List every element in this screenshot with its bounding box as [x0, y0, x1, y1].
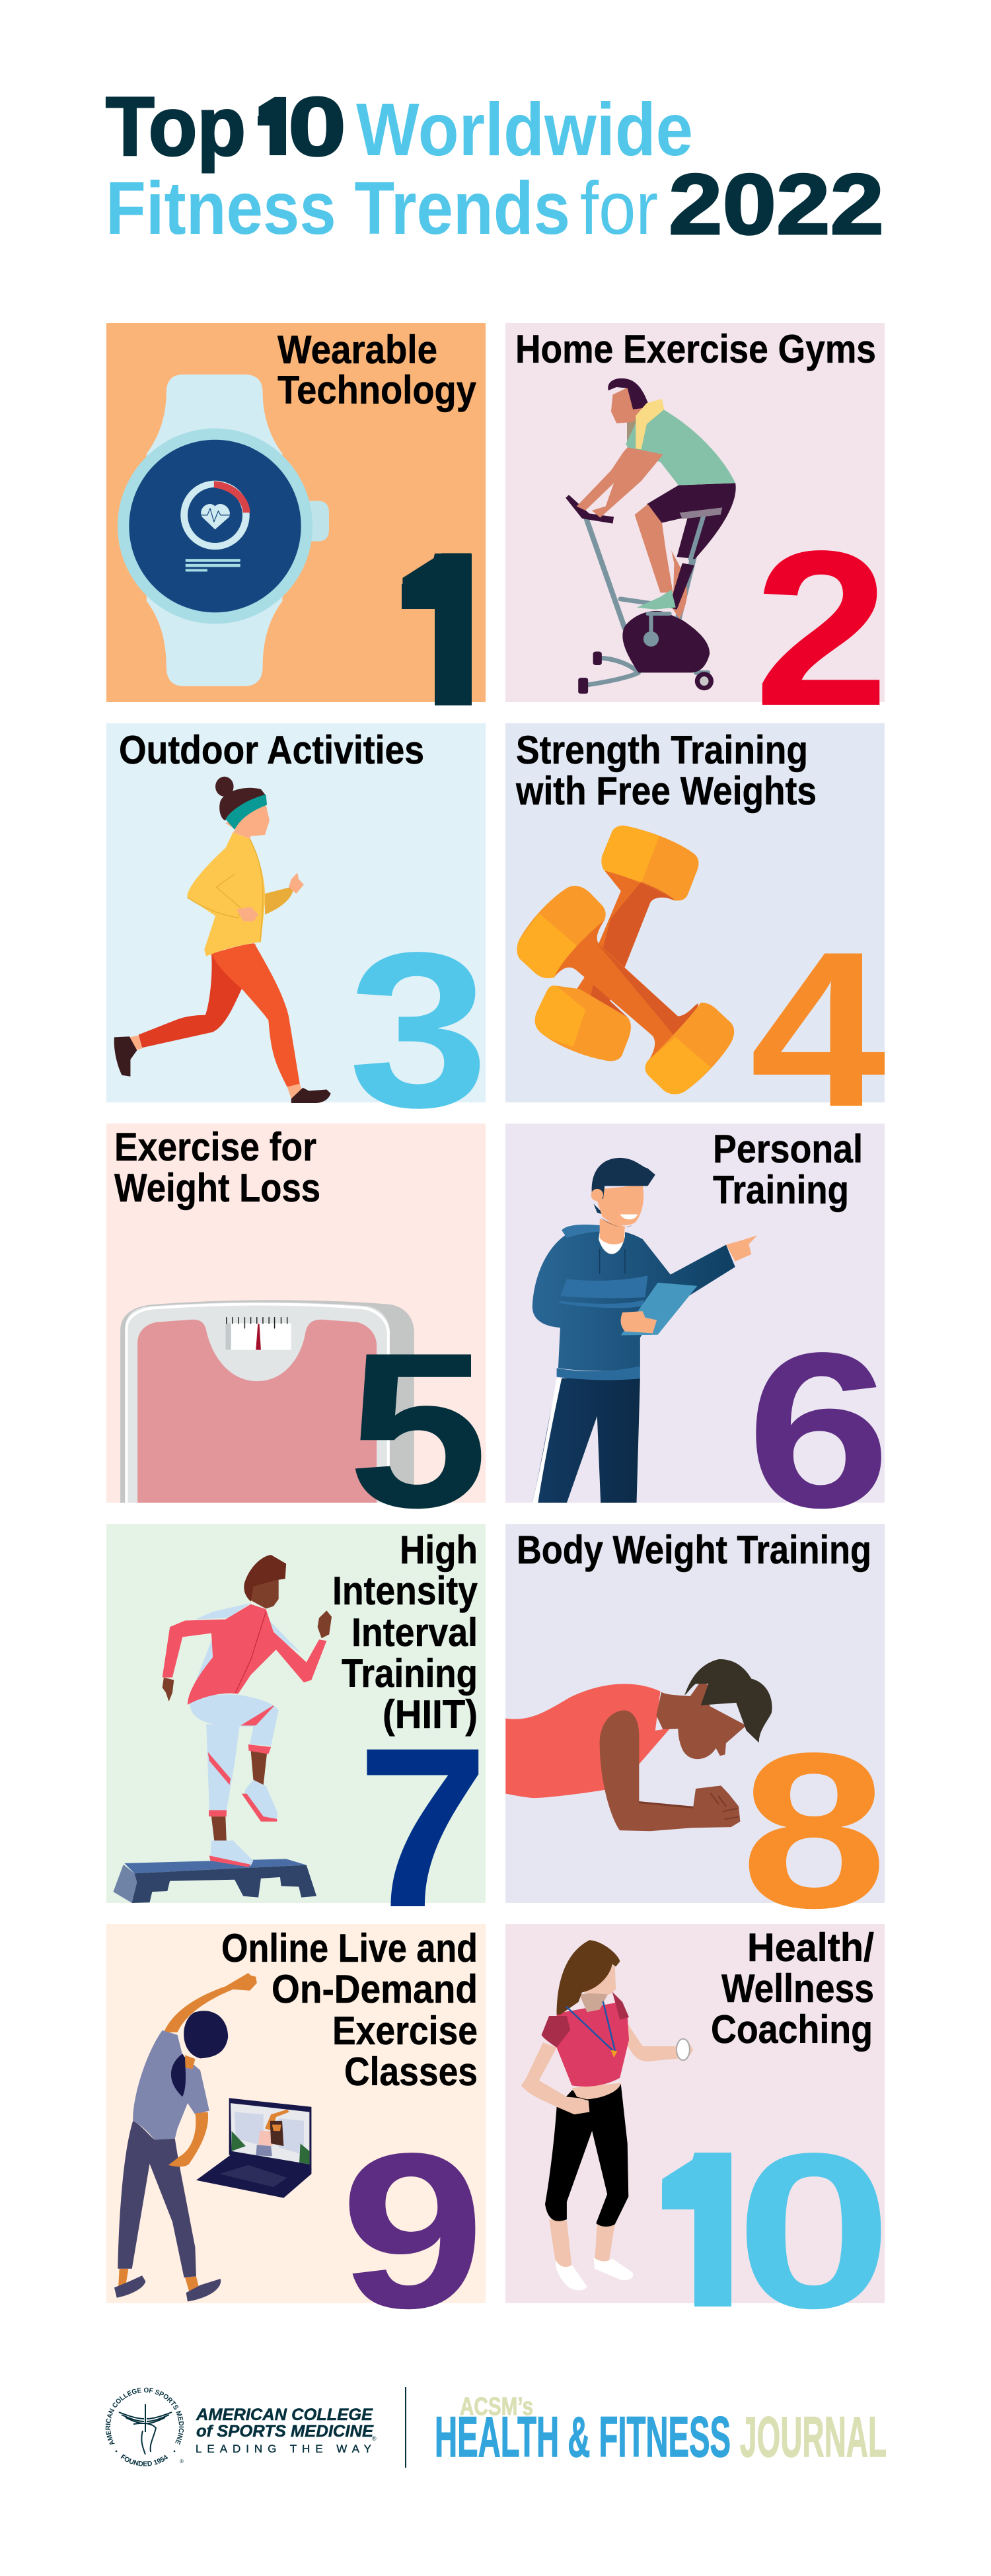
icon: personal trainer with tablet	[532, 1158, 757, 1503]
heading: exercise for weight loss	[114, 1125, 320, 1210]
title: 1	[254, 80, 303, 173]
panel: 4 strength training with free weights	[505, 723, 885, 1102]
title: 0	[288, 80, 346, 173]
icon: coach with stopwatch	[521, 1940, 693, 2291]
number 5: 5	[348, 1306, 488, 1554]
panel: 9 online live and on-demand exercise classes	[106, 1924, 486, 2303]
title: Worldwide	[356, 88, 693, 171]
number 1: 1	[387, 505, 513, 752]
icon: crossed dumbbells	[517, 826, 734, 1094]
heading: high intensity interval training (HIIT): Interval	[351, 1610, 478, 1655]
icon: ACSM seal: FOUNDED 1954	[120, 2454, 168, 2466]
heading: wearable technology: Technology	[277, 368, 477, 412]
number 3: 3	[348, 906, 489, 1153]
panel: 6 personal training	[505, 1124, 885, 1503]
icon: ACSM seal: ®	[180, 2458, 184, 2464]
heading: high intensity interval training (HIIT): Training	[342, 1651, 478, 1696]
panel: 10 health wellness coaching	[505, 1924, 885, 2303]
text: of Sports Medicine: of SPORTS MEDICINE	[196, 2422, 374, 2441]
text: American College of Sports Medicine: AMERICAN COLLEGE	[196, 2406, 373, 2424]
panel: 2 home exercise gyms	[505, 323, 885, 702]
heading: body weight training: Body Weight Training	[517, 1528, 871, 1572]
heading: personal training	[713, 1127, 863, 1212]
number 10	[662, 2153, 881, 2309]
icon: bathroom scale	[120, 1300, 414, 1503]
heading: health wellness coaching: Coaching	[711, 2007, 873, 2052]
text: registered mark: ®	[372, 2435, 377, 2442]
heading: personal training: Training	[713, 1168, 849, 1212]
heading: health wellness coaching	[711, 1925, 874, 2052]
heading: personal training: Personal	[713, 1127, 863, 1171]
heading: health wellness coaching: Wellness	[721, 1966, 874, 2011]
icon: smartwatch	[118, 375, 329, 686]
footer: ACSM logo	[106, 2387, 377, 2466]
number 10: 0	[735, 2107, 893, 2354]
heading: strength training with free weights	[515, 728, 817, 813]
heading: strength training with free weights: Strength Training	[516, 728, 808, 772]
icon: woman on exercise step	[113, 1555, 332, 1903]
number 9: 9	[340, 2107, 485, 2354]
heading: wearable technology	[277, 328, 477, 412]
heading: health wellness coaching: Health/	[747, 1925, 874, 1970]
panel: 1 wearable technology	[106, 323, 486, 702]
panel: 3 outdoor activities	[106, 723, 486, 1103]
heading: outdoor activities: Outdoor Activities	[119, 728, 424, 772]
heading: high intensity interval training (HIIT): Intensity	[332, 1569, 478, 1613]
heading: online live and on-demand exercise classes: Exercise	[332, 2009, 478, 2053]
number 2: 2	[754, 505, 889, 752]
number 1	[402, 554, 472, 705]
heading: wearable technology: Wearable	[277, 328, 437, 372]
number 7: 7	[357, 1701, 489, 1955]
heading: high intensity interval training (HIIT)	[332, 1528, 478, 1736]
number 8: 8	[741, 1707, 887, 1954]
footer: ACSM's Health & Fitness Journal logo: ACSM’s	[460, 2393, 533, 2421]
number 10: 1	[647, 2106, 772, 2353]
number 4: 4	[750, 906, 887, 1153]
heading: online live and on-demand exercise classes: Classes	[344, 2050, 478, 2094]
icon: ACSM seal: AMERICAN COLLEGE OF SPORTS MEDICINE	[106, 2387, 184, 2445]
icon: woman stretching with laptop	[114, 1973, 311, 2301]
text: leading the way: LEADING THE WAY	[196, 2443, 371, 2455]
heading: high intensity interval training (HIIT): High	[400, 1528, 478, 1572]
icon: cyclist on exercise bike	[566, 378, 736, 694]
panel: 5 exercise for weight loss	[106, 1124, 486, 1503]
title: Top	[106, 80, 246, 173]
heading: online live and on-demand exercise classes: On-Demand	[272, 1967, 478, 2011]
title: for	[580, 166, 658, 250]
footer: ACSM's Health & Fitness Journal logo: HEALTH & FITNESS	[435, 2406, 731, 2469]
heading: online live and on-demand exercise classes	[221, 1926, 478, 2094]
heading: high intensity interval training (HIIT): (HIIT)	[383, 1692, 478, 1736]
heading: exercise for weight loss: Exercise for	[114, 1125, 316, 1169]
heading: strength training with free weights: with Free Weights	[515, 769, 817, 813]
title: Fitness Trends	[106, 166, 570, 250]
panel: 7 high intensity interval training	[106, 1524, 486, 1903]
heading: home exercise gyms: Home Exercise Gyms	[515, 327, 876, 371]
number 6: 6	[747, 1306, 891, 1554]
icon: person in plank	[505, 1659, 772, 1831]
heading: online live and on-demand exercise classes: Online Live and	[221, 1926, 478, 1970]
heading: exercise for weight loss: Weight Loss	[114, 1166, 320, 1210]
icon: runner	[114, 777, 331, 1103]
title	[106, 96, 881, 236]
title: 2022	[669, 156, 884, 252]
panel: 8 body weight training	[505, 1524, 885, 1903]
